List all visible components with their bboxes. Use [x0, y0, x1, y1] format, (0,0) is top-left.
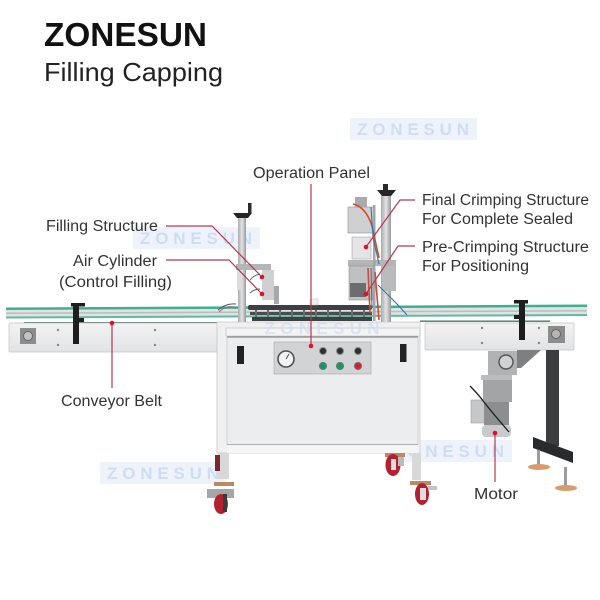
caster: front left [207, 453, 234, 514]
watermark: lower left: ZONESUN [107, 464, 219, 483]
callout: air cylinder: (Control Filling) [59, 274, 172, 291]
callout: pre-crimping structure: Pre-Crimping Structure [422, 239, 589, 256]
guide bracket: left [71, 303, 85, 344]
callout: pre-crimping structure [364, 239, 589, 296]
buttons [319, 362, 362, 370]
callout: operation panel: Operation Panel [253, 165, 370, 182]
callout: final crimping structure: For Complete Sealed [422, 211, 573, 228]
door latch: left [237, 346, 244, 364]
door latch: right [400, 344, 406, 362]
callout: final crimping structure [364, 192, 589, 249]
caster: front right [410, 453, 437, 505]
control panel [274, 342, 371, 374]
callout: operation panel [253, 165, 370, 348]
filling assembly: left [218, 203, 279, 322]
turntable [248, 299, 372, 321]
watermark: lower right: ZONESUN [392, 442, 504, 461]
callout: pre-crimping structure: For Positioning [422, 258, 529, 275]
callout: final crimping structure: Final Crimping Structure [422, 192, 589, 209]
machine frame [217, 319, 420, 453]
pressure gauge [278, 351, 294, 367]
watermark: upper left: ZONESUN [140, 229, 252, 248]
motor assembly [470, 350, 541, 437]
crimping assembly: right [348, 184, 407, 322]
title: ZONESUN [44, 16, 207, 53]
guide bracket: right [514, 300, 528, 340]
callout: air cylinder: Air Cylinder [73, 253, 157, 270]
watermark: top right: ZONESUN [357, 120, 469, 139]
conveyor side plate: left [9, 323, 219, 352]
knobs [320, 348, 362, 354]
caster: rear middle [385, 453, 405, 476]
conveyor support leg [528, 350, 577, 491]
subtitle: Filling Capping [44, 57, 223, 87]
callout: filling structure [46, 218, 264, 279]
conveyor side plate: right [425, 323, 574, 350]
casters [207, 453, 437, 514]
callout: motor [474, 431, 518, 503]
machine watermark: ZONESUN [264, 319, 380, 338]
callout: conveyor belt [61, 321, 163, 410]
callout: motor: Motor [474, 486, 518, 503]
callout: conveyor belt: Conveyor Belt [61, 393, 163, 410]
callout: air cylinder [59, 253, 264, 296]
conveyor belt [6, 300, 587, 352]
callout: filling structure: Filling Structure [46, 218, 158, 235]
